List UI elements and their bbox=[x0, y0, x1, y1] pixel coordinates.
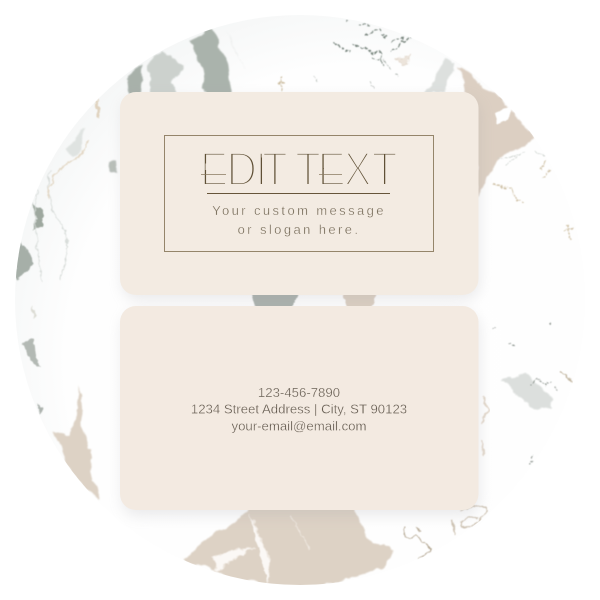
card shadows bbox=[122, 98, 480, 516]
grey and tan marble between the cards bbox=[252, 295, 376, 306]
heading crossbars bbox=[206, 164, 344, 170]
dark green speckles top bbox=[314, 20, 412, 88]
tan marble lower left bbox=[53, 385, 99, 500]
dark flecks lower right bbox=[492, 323, 572, 465]
back card bbox=[120, 306, 478, 510]
email address: your-email@email.com bbox=[231, 418, 367, 434]
white veins in bottom tan marble bbox=[213, 515, 310, 585]
heading rule bbox=[207, 193, 390, 194]
grey marble veins top left bbox=[64, 28, 246, 174]
gold flecks upper area bbox=[278, 76, 574, 240]
grey marble veins left edge bbox=[14, 97, 100, 282]
front card bbox=[120, 92, 478, 295]
tan marble top right bbox=[457, 67, 533, 197]
grey spots lower left bbox=[23, 305, 44, 415]
tan flecks right of back card bbox=[482, 395, 488, 455]
white patch in tan marble bbox=[495, 106, 513, 124]
heading: EDIT TEXT: EDIT TEXT bbox=[200, 142, 398, 196]
tan marble bottom bbox=[184, 510, 394, 585]
brown squiggles bottom right bbox=[404, 506, 488, 558]
gold frame bbox=[164, 136, 434, 252]
slogan line one: Your custom message bbox=[212, 203, 386, 218]
street address: 1234 Street Address | City, ST 90123 bbox=[191, 402, 407, 416]
phone number: 123-456-7890 bbox=[258, 385, 340, 400]
slogan line two: or slogan here. bbox=[238, 222, 360, 237]
grey streak lower right bbox=[500, 375, 557, 408]
grey streak top right bbox=[425, 57, 456, 92]
